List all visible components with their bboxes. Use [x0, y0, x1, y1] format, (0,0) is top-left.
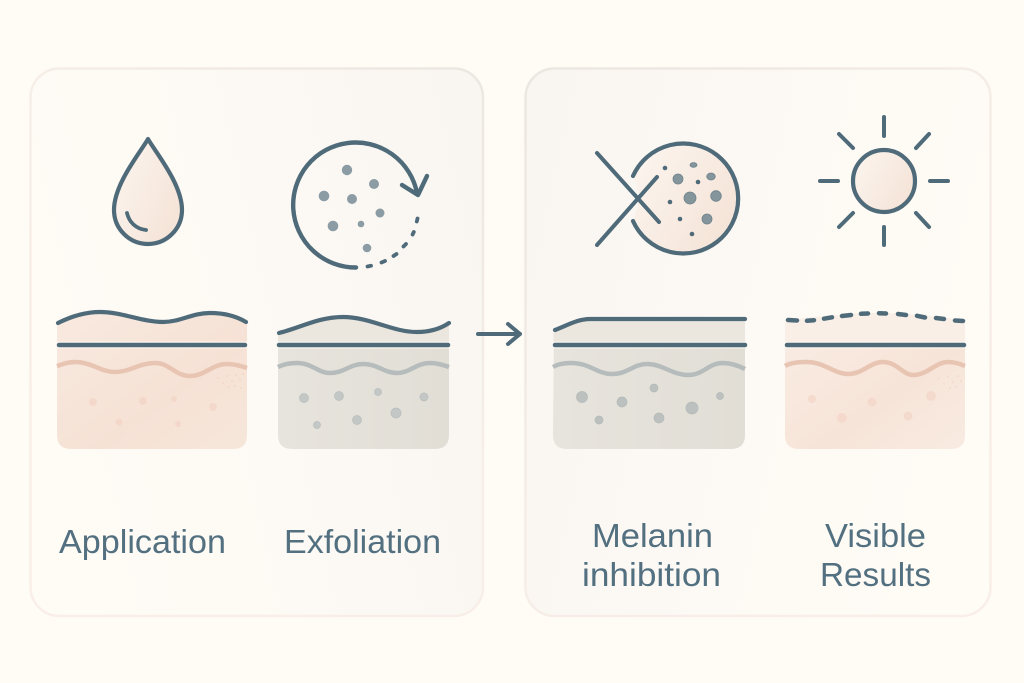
- arrow between panels: [478, 324, 520, 344]
- label: exfoliation: Exfoliation: [284, 523, 441, 560]
- panel: application and exfoliation: [30, 68, 483, 616]
- icon: melanin blocked: [597, 144, 738, 253]
- skin diagram: visible results: [785, 313, 965, 449]
- label: melanin inhibition: inhibition: [582, 556, 721, 593]
- skin diagram: exfoliation: [278, 317, 449, 449]
- skin diagram: application: [57, 312, 247, 449]
- label: melanin inhibition: [582, 517, 721, 593]
- label: visible results: Visible: [825, 517, 926, 554]
- label: visible results: [820, 517, 931, 593]
- label: melanin inhibition: Melanin: [592, 517, 713, 554]
- skin diagram: melanin inhibition: [553, 319, 745, 449]
- icon: exfoliation cycle: [293, 143, 427, 268]
- icon: sun: [820, 117, 948, 245]
- label: visible results: Results: [820, 556, 931, 593]
- icon: water drop: [114, 139, 182, 244]
- label: application: Application: [59, 523, 226, 560]
- panel: melanin inhibition and visible results: [526, 68, 990, 616]
